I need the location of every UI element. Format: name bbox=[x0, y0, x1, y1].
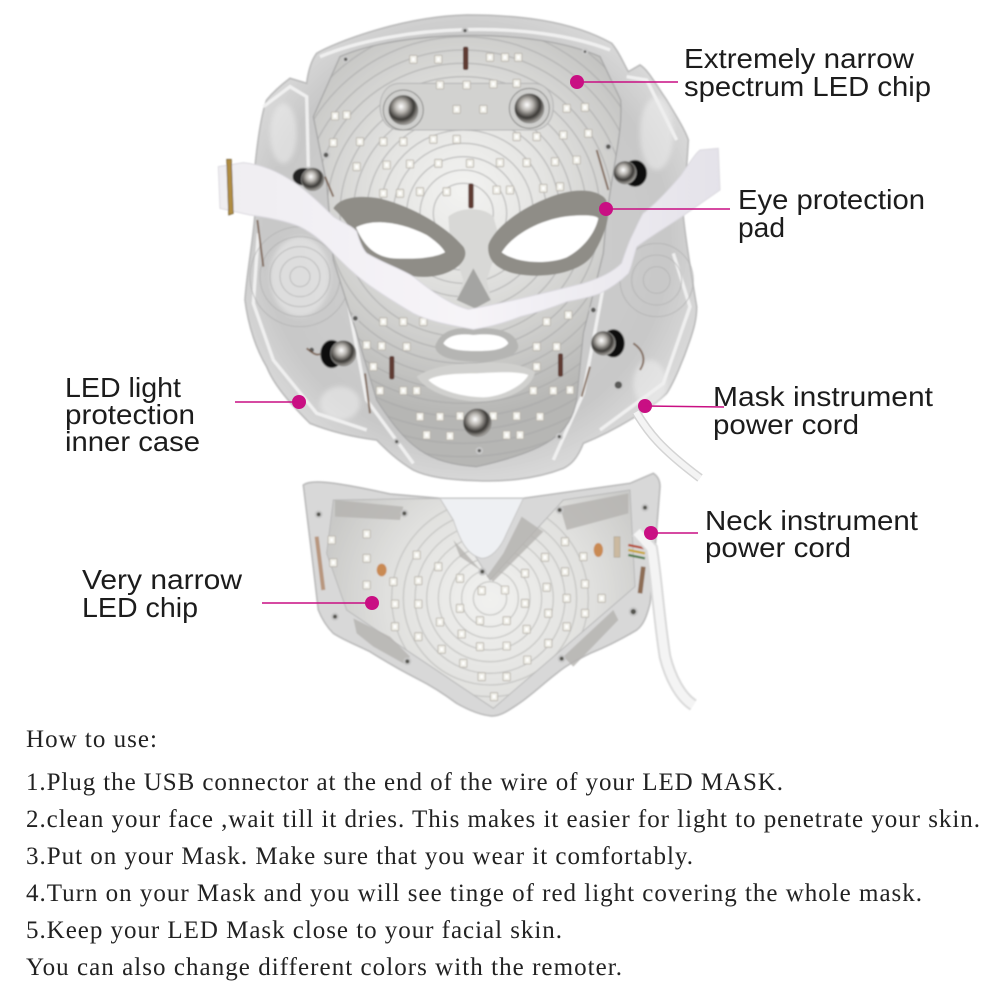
metal electrodes bbox=[293, 88, 647, 437]
nose bridge bbox=[448, 209, 500, 308]
neck orange components bbox=[377, 543, 603, 576]
step 2: 2.clean your face ,wait till it dries. This makes it easier for light to penetrate your skin. bbox=[26, 806, 980, 833]
neck dark corners bbox=[335, 493, 628, 667]
brown wiring details bbox=[257, 150, 643, 413]
label: LED light protection inner case: LED light bbox=[65, 372, 181, 403]
label: neck instrument power cord bbox=[705, 505, 918, 563]
heading: how to use: How to use: bbox=[26, 726, 157, 753]
neck rings bbox=[392, 500, 588, 697]
neck inner plate bbox=[327, 490, 635, 708]
mask outer transparent shell bbox=[245, 15, 697, 481]
step 4: 4.Turn on your Mask and you will see tinge of red light covering the whole mask. bbox=[26, 880, 922, 907]
neck LEDs bbox=[328, 530, 605, 701]
callout: inner case pointer bbox=[235, 395, 306, 409]
label: LED light protection inner case: protection bbox=[65, 399, 195, 430]
step 5: 5.Keep your LED Mask close to your facial skin. bbox=[26, 917, 562, 944]
label: very narrow LED chip bbox=[82, 564, 243, 623]
label: very narrow LED chip: LED chip bbox=[82, 592, 198, 623]
shell mottling bbox=[270, 97, 673, 420]
left eye opening bbox=[356, 222, 445, 259]
label: extremely narrow spectrum LED chip: spectrum LED chip bbox=[684, 71, 931, 102]
label: eye protection pad bbox=[738, 184, 925, 243]
label: mask instrument power cord bbox=[713, 381, 933, 440]
label: LED light protection inner case bbox=[65, 372, 200, 457]
label: mask instrument power cord: power cord bbox=[713, 409, 859, 440]
neck side brown trim bbox=[317, 537, 323, 590]
right eye opening bbox=[502, 215, 598, 262]
closing note: You can also change different colors with the remoter. bbox=[26, 954, 622, 981]
label: mask instrument power cord: Mask instrument bbox=[713, 381, 933, 412]
right eye pad bbox=[488, 190, 608, 276]
cheek rings bbox=[250, 227, 693, 327]
callout: extremely narrow spectrum LED chip pointer bbox=[570, 75, 678, 89]
neck power cord bbox=[637, 532, 693, 705]
label: neck instrument power cord: Neck instrument bbox=[705, 505, 918, 536]
mask photo: face mask bbox=[218, 0, 720, 481]
neck screws bbox=[316, 505, 648, 664]
neck coloured wires bbox=[614, 537, 645, 558]
instructions: how to use bbox=[26, 726, 980, 981]
concentric rings on plate bbox=[314, 36, 620, 404]
neck piece photo bbox=[303, 473, 693, 716]
neck outer shell bbox=[303, 473, 660, 716]
screws bbox=[308, 28, 623, 453]
label: neck instrument power cord: power cord bbox=[705, 532, 851, 563]
LEDs bbox=[330, 53, 592, 440]
callout: very narrow LED chip pointer bbox=[262, 596, 379, 610]
elastic strap bbox=[218, 148, 720, 329]
label: eye protection pad: Eye protection bbox=[738, 184, 925, 215]
label: LED light protection inner case: inner case bbox=[65, 426, 200, 457]
step 1: 1.Plug the USB connector at the end of the wire of your LED MASK. bbox=[26, 769, 783, 796]
callout: mask power cord pointer bbox=[638, 399, 724, 413]
callout: eye protection pad pointer bbox=[599, 202, 730, 216]
label: eye protection pad: pad bbox=[738, 212, 785, 243]
mouth opening bbox=[417, 363, 535, 402]
callout: neck power cord pointer bbox=[644, 526, 698, 540]
resistor slots bbox=[389, 47, 563, 379]
label: very narrow LED chip: Very narrow bbox=[82, 564, 243, 595]
nose opening bbox=[435, 328, 518, 362]
label: extremely narrow spectrum LED chip: Extremely narrow bbox=[684, 43, 915, 74]
mask power cord bbox=[636, 412, 700, 478]
mask shell detail bbox=[253, 29, 690, 463]
neck V-notch bbox=[440, 498, 523, 558]
face plate bbox=[313, 35, 621, 467]
label: extremely narrow spectrum LED chip bbox=[684, 43, 931, 102]
left eye pad bbox=[333, 197, 465, 277]
strap gold clip bbox=[227, 159, 233, 215]
step 3: 3.Put on your Mask. Make sure that you wear it comfortably. bbox=[26, 843, 693, 870]
forehead electrode panel bbox=[380, 83, 553, 130]
